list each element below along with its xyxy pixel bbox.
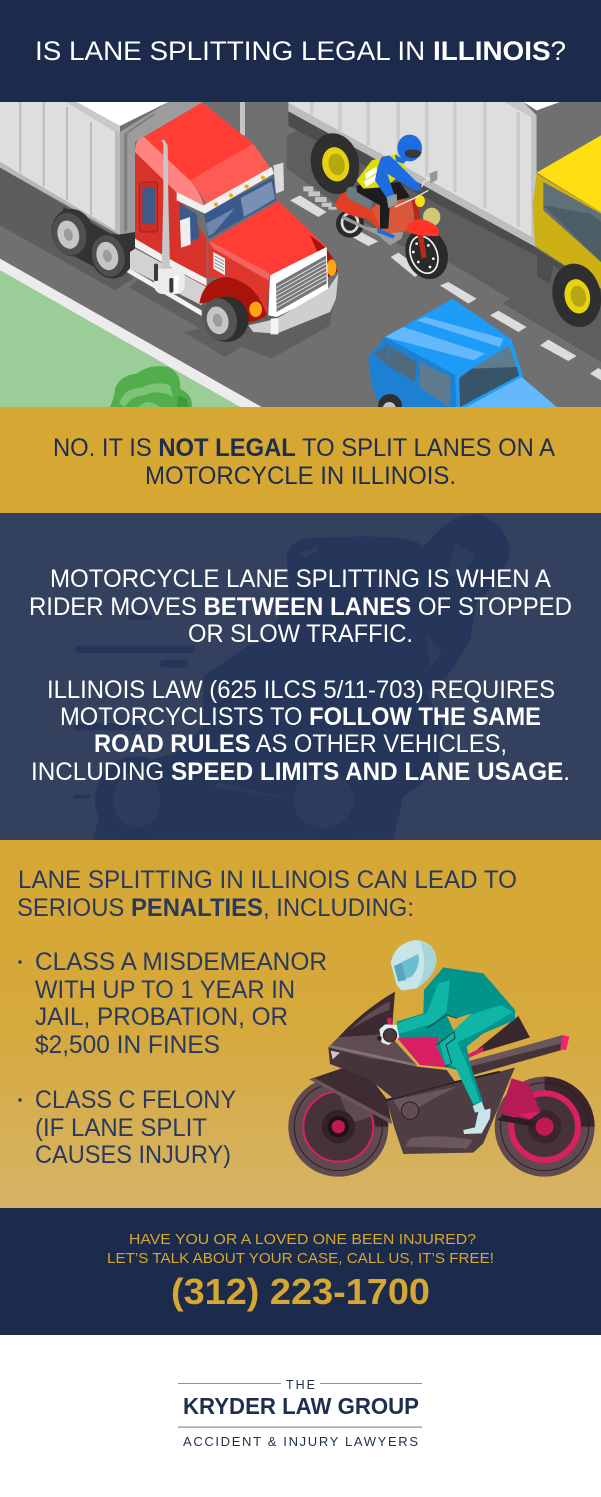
exhaust puff xyxy=(303,186,337,210)
bullet: class A misdemeanor: WITH UP TO 1 YEAR IN xyxy=(35,976,295,1004)
bullet: class A misdemeanor: JAIL, PROBATION, OR xyxy=(35,1003,288,1031)
panel: answer banner xyxy=(0,407,601,513)
bullet: class A misdemeanor: CLASS A MISDEMEANOR xyxy=(35,948,327,976)
road shading xyxy=(0,167,133,290)
truck fender and wheel xyxy=(199,277,267,322)
penalties heading: LANE SPLITTING IN ILLINOIS CAN LEAD TO xyxy=(18,866,517,894)
law text: INCLUDING SPEED LIMITS AND LANE USAGE. xyxy=(31,758,570,786)
background motorcycle silhouette xyxy=(73,515,510,843)
title: IS LANE SPLITTING LEGAL IN ILLINOIS? xyxy=(35,36,566,66)
phone number: (312) 223-1700 xyxy=(171,1271,430,1312)
silhouette highlights xyxy=(113,543,475,828)
lane dashes xyxy=(290,195,601,380)
truck bumper xyxy=(248,274,338,334)
law text: MOTORCYCLISTS TO FOLLOW THE SAME xyxy=(60,703,541,731)
penalties heading: SERIOUS PENALTIES, INCLUDING: xyxy=(17,894,414,922)
seat xyxy=(477,1016,530,1052)
truck grille xyxy=(268,247,328,317)
call to action text xyxy=(107,1231,494,1267)
yellow truck xyxy=(533,135,601,332)
panel: call to action xyxy=(0,1208,601,1335)
front fender xyxy=(309,1068,392,1124)
logo: The Kryder Law Group: THE xyxy=(286,1378,315,1392)
red truck cab xyxy=(135,104,338,344)
call to action text: LET’S TALK ABOUT YOUR CASE, CALL US, IT’S FREE! xyxy=(107,1250,494,1267)
definition text: OR SLOW TRAFFIC. xyxy=(188,620,413,648)
bullet: class C felony xyxy=(18,1086,236,1169)
answer text: MOTORCYCLE IN ILLINOIS. xyxy=(145,462,456,490)
logo: The Kryder Law Group xyxy=(178,1378,422,1449)
exhaust stack far xyxy=(240,102,245,135)
definition text: RIDER MOVES BETWEEN LANES OF STOPPED xyxy=(29,593,572,621)
call to action text: HAVE YOU OR A LOVED ONE BEEN INJURED? xyxy=(129,1231,476,1248)
lower fairing xyxy=(387,1067,515,1154)
right trailer wheel xyxy=(310,133,360,194)
front wheel xyxy=(288,1077,388,1177)
panel: penalties xyxy=(0,840,601,1208)
answer text: NO. IT IS NOT LEGAL TO SPLIT LANES ON A xyxy=(53,434,555,462)
left trailer wheels xyxy=(63,207,135,267)
answer text xyxy=(53,434,555,490)
bullet: class C felony: (IF LANE SPLIT xyxy=(35,1114,207,1142)
upper fairing xyxy=(328,1034,455,1098)
truck chassis xyxy=(130,249,207,305)
right trailer xyxy=(288,102,532,237)
illustration: motorcycle rider xyxy=(288,940,595,1177)
fuel tank xyxy=(154,268,185,294)
bullet: class A misdemeanor xyxy=(18,948,327,1059)
exhaust stack xyxy=(161,140,170,269)
left trailer xyxy=(0,102,115,230)
motorcycle rider xyxy=(334,135,455,285)
bullet: class A misdemeanor: $2,500 IN FINES xyxy=(35,1031,220,1059)
grass and curb xyxy=(0,259,262,407)
glove and grip xyxy=(379,1024,399,1045)
bush xyxy=(110,366,192,407)
panel: title header xyxy=(0,0,601,102)
blue car xyxy=(368,299,557,418)
penalties heading xyxy=(17,866,517,922)
truck door and windows xyxy=(139,182,158,232)
bullet: class C felony: CAUSES INJURY) xyxy=(35,1141,231,1169)
rider suit xyxy=(397,967,515,1105)
windscreen xyxy=(338,992,395,1037)
rear wheel xyxy=(495,1077,595,1177)
panel: explanation xyxy=(0,513,601,843)
law text: ROAD RULES AS OTHER VEHICLES, xyxy=(94,730,507,758)
illustration: traffic scene with lane-splitting motorcycle xyxy=(0,102,601,418)
truck hood xyxy=(208,201,327,275)
logo: The Kryder Law Group: KRYDER LAW GROUP xyxy=(183,1393,419,1419)
logo: The Kryder Law Group: ACCIDENT & INJURY LAWYERS xyxy=(183,1434,418,1449)
definition text: MOTORCYCLE LANE SPLITTING IS WHEN A xyxy=(50,565,551,593)
tank xyxy=(387,1017,392,1034)
boot xyxy=(473,1102,485,1113)
swingarm xyxy=(500,1078,541,1119)
tail xyxy=(463,1035,563,1075)
definition text xyxy=(29,565,572,648)
helmet xyxy=(391,940,437,991)
law text: ILLINOIS LAW (625 ILCS 5/11-703) REQUIRES xyxy=(47,676,555,704)
law text xyxy=(31,676,570,786)
bullet: class C felony: CLASS C FELONY xyxy=(35,1086,236,1114)
